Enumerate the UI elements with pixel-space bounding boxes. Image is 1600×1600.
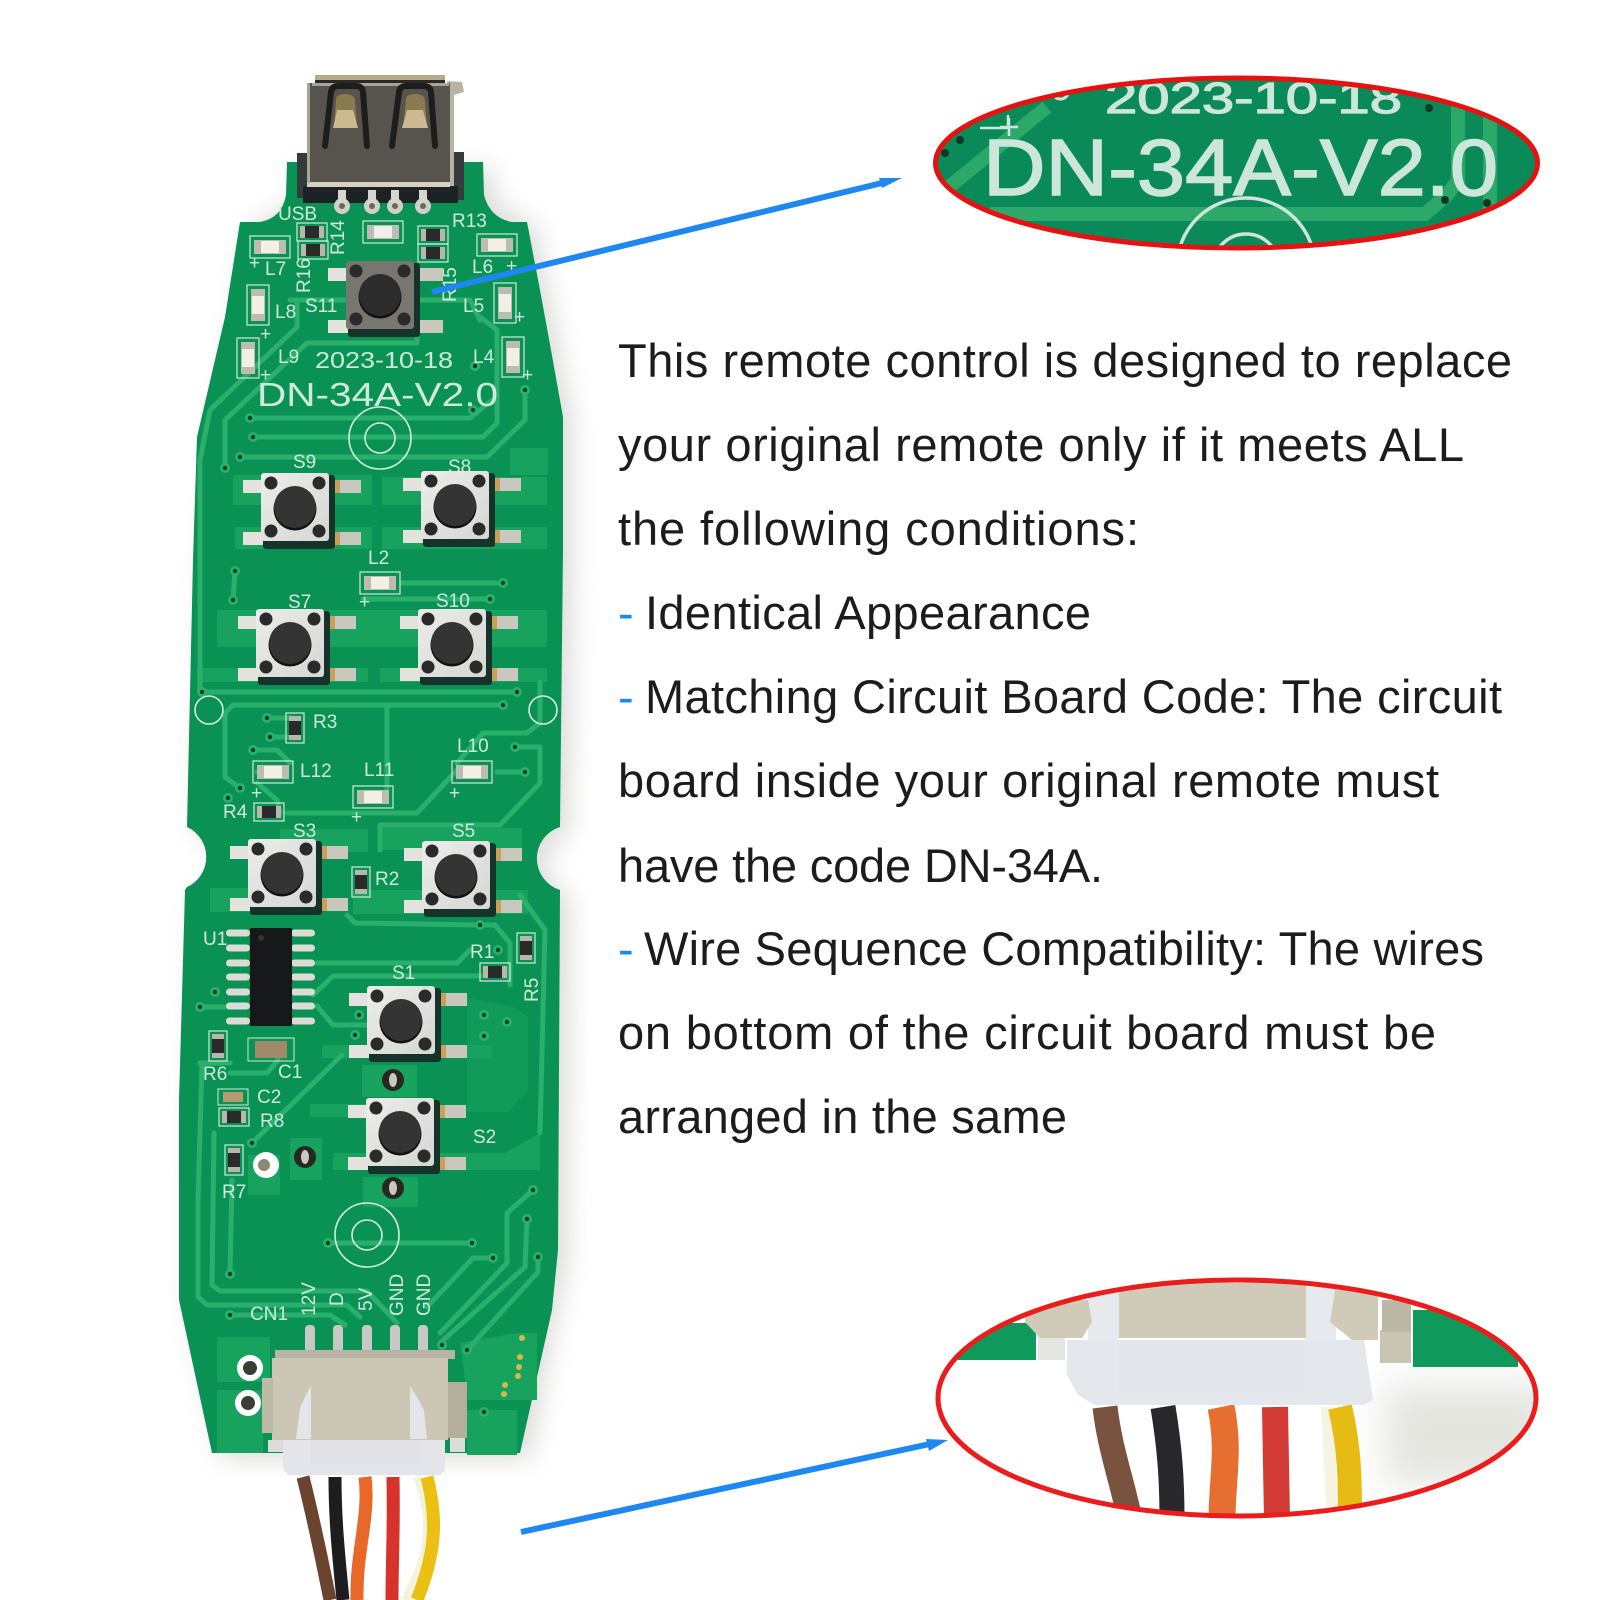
silkscreen labels: L4 [473,347,495,368]
silkscreen labels: L11 [364,760,394,781]
silkscreen labels: R4 [223,802,248,823]
condition: matching circuit board code: - [618,670,634,723]
callout: magnified board code: 9 [1050,63,1073,109]
silkscreen labels: L9 [278,347,299,368]
silkscreen labels: D [327,1292,348,1306]
silkscreen labels: R15 [440,267,461,302]
USB connector [297,75,464,214]
tactile switches [230,261,522,1174]
silkscreen circles [195,407,557,1267]
silkscreen labels: C1 [278,1062,302,1083]
intro text: This remote control is designed to replace [618,334,1512,387]
silkscreen labels: S5 [452,821,475,842]
arrow: board label to magnified code [432,178,902,292]
silkscreen labels: + [249,253,260,274]
silkscreen labels: S9 [293,452,316,473]
silkscreen labels [203,204,543,1325]
silkscreen labels: 5V [356,1287,377,1311]
silkscreen labels: + [449,783,460,804]
arrow: connector to magnified wires [521,1439,948,1532]
panel: circuit board photo [179,75,563,1600]
board shadow [189,168,573,1459]
silkscreen labels: 12V [299,1282,320,1316]
silkscreen labels: R6 [203,1064,227,1085]
silkscreen labels: L8 [275,302,296,323]
intro text [618,334,1512,555]
silkscreen labels: C2 [257,1087,281,1108]
vias [195,361,543,1417]
wire connector CN1 [262,1325,467,1475]
callout: magnified board code: DN-34A-V2.0 [983,123,1498,212]
silkscreen labels: S7 [288,592,311,613]
condition: identical appearance: Identical Appearance [645,586,1091,639]
silkscreen labels: GND [414,1274,435,1316]
silkscreen labels: L5 [463,296,484,317]
condition: wire sequence compatibility: arranged in the same [618,1090,1067,1143]
intro text: the following conditions: [618,502,1139,555]
circuit traces [198,300,545,1350]
silkscreen labels: + [514,307,525,328]
silkscreen labels: L7 [265,259,286,280]
condition: identical appearance: - [618,586,634,639]
silkscreen labels: R1 [470,942,494,963]
LEDs [237,221,524,808]
condition: wire sequence compatibility: - [618,922,634,975]
callout: magnified wire sequence [938,1280,1555,1520]
silkscreen labels: L2 [368,548,389,569]
silkscreen labels: + [260,324,271,345]
silkscreen labels: DN-34A-V2.0 [257,376,498,413]
intro text: your original remote only if it meets ALL [618,418,1464,471]
silkscreen labels: R2 [375,869,399,890]
callout: magnified board code [933,76,1540,250]
silkscreen labels: S3 [293,821,316,842]
silkscreen labels: 2023-10-18 [315,347,453,373]
copper pours [197,448,548,1455]
text block: compatibility conditions [618,334,1512,1143]
silkscreen labels: USB [278,204,317,225]
silkscreen labels: L10 [457,736,489,757]
silkscreen labels: R14 [328,220,349,255]
silkscreen labels: S8 [448,457,471,478]
condition: wire sequence compatibility: on bottom of the circuit board must be [618,1006,1436,1059]
silkscreen labels: CN1 [250,1304,288,1325]
condition: matching circuit board code: have the code DN-34A. [618,839,1103,892]
silkscreen labels: R8 [260,1111,284,1132]
silkscreen labels: + [351,807,362,828]
silkscreen labels: R3 [313,712,337,733]
silkscreen labels: R7 [222,1182,246,1203]
condition: matching circuit board code: Matching Circuit Board Code: The circuit [645,670,1502,723]
silkscreen labels: R13 [452,211,487,232]
chip U1 [226,928,315,1026]
silkscreen labels: L6 [472,257,493,278]
gold test pads [501,1335,525,1397]
silkscreen labels: U1 [203,929,227,950]
silkscreen labels: + [522,365,533,386]
silkscreen labels: + [260,365,271,386]
solder points [235,1069,404,1416]
silkscreen labels: R16 [294,258,315,293]
condition: wire sequence compatibility: Wire Sequence Compatibility: The wires [644,922,1484,975]
silkscreen labels: S10 [436,591,470,612]
condition: matching circuit board code [618,670,1502,892]
resistors and capacitors [209,223,535,1175]
silkscreen labels: + [359,592,370,613]
silkscreen labels: + [506,256,517,277]
silkscreen labels: S1 [392,963,415,984]
condition: wire sequence compatibility [618,922,1484,1143]
board outline [179,162,563,1453]
silkscreen labels: GND [387,1274,408,1316]
condition: matching circuit board code: board inside your original remote must [618,754,1439,807]
silkscreen labels: S2 [473,1127,496,1148]
silkscreen labels: + [251,783,262,804]
silkscreen labels: R5 [522,978,543,1002]
callout: magnified board code: 2023-10-18 [1105,74,1402,123]
silkscreen labels: L12 [300,761,332,782]
wires [303,1477,434,1600]
silkscreen labels: S11 [305,296,337,317]
